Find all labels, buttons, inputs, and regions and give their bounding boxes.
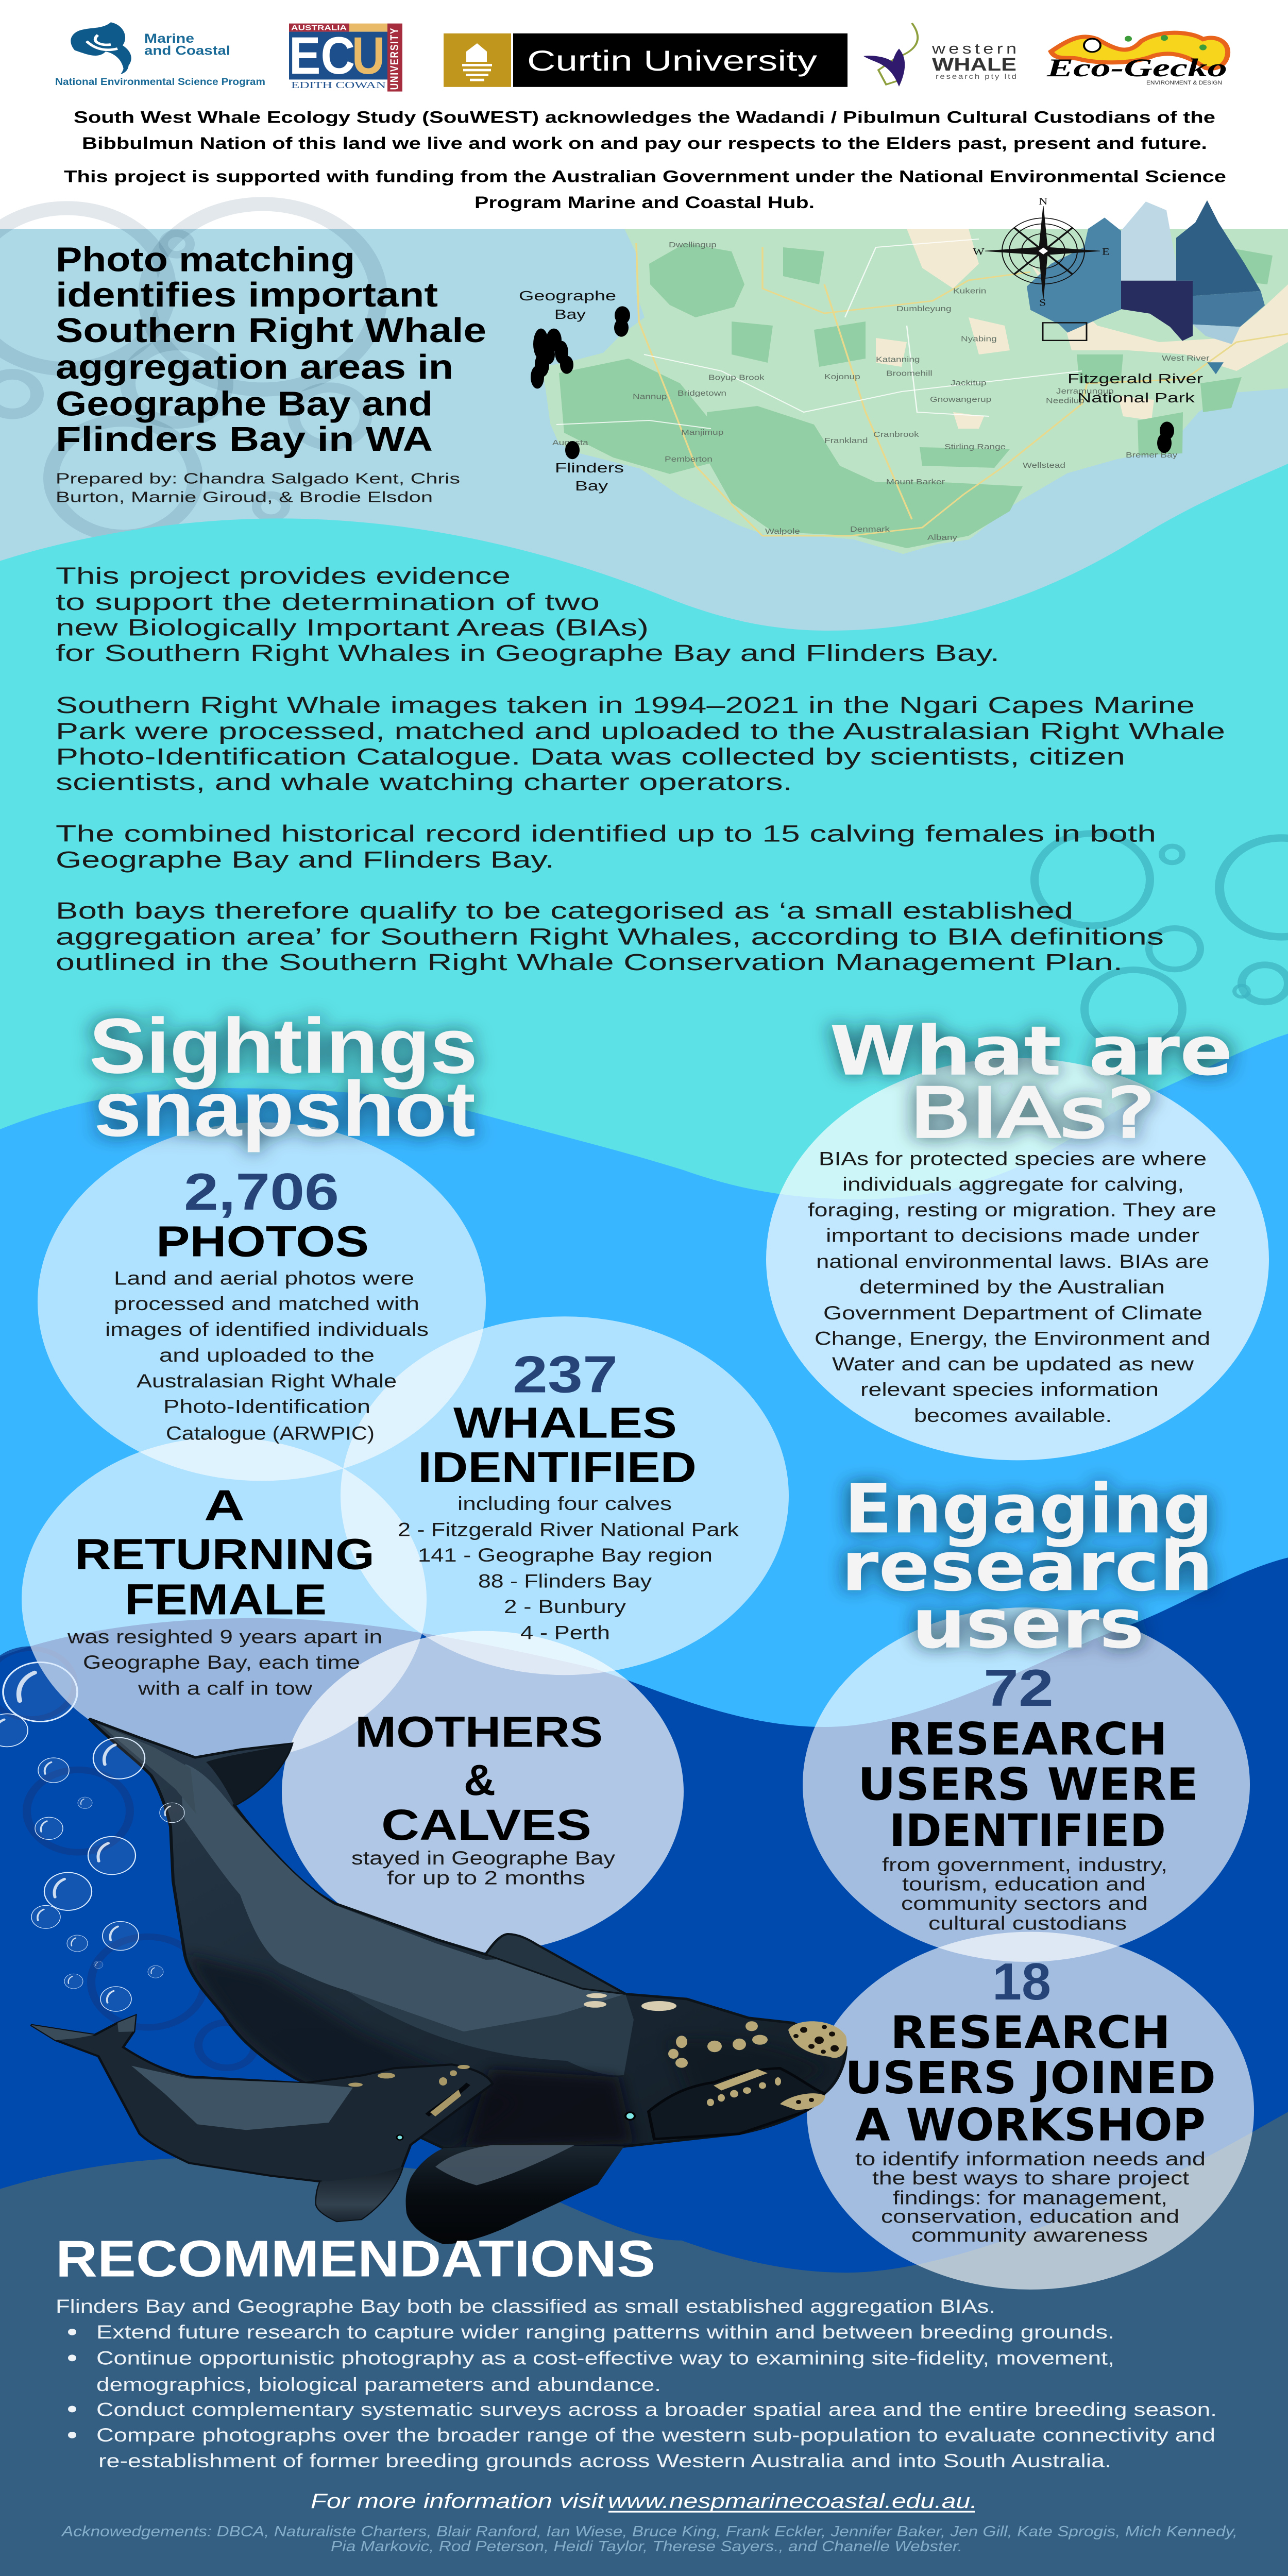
logo: Western Whale Research: WHALE [932,55,1016,75]
whale: callosity texture [793,2025,839,2104]
text: BIAs definition: BIAs for protected species are where [819,1148,1207,1170]
text: whales identified: 141 - Geographe Bay region [418,1545,713,1566]
text: returning female: RETURNING [75,1530,375,1579]
text: returning female: was resighted 9 years apart in [67,1626,382,1648]
map: small place names: Bridgetown [677,388,726,398]
title: Southern Right Whale [56,311,486,350]
text: mothers and calves: CALVES [381,1801,591,1850]
text: 72 research users identified: tourism, education and [902,1873,1146,1895]
title: identifies important [56,276,438,314]
map: small place names: Gnowangerup [930,395,991,404]
body text [56,562,1225,975]
title: Geographe Bay and [56,384,433,423]
map inset: Australia [1027,200,1265,374]
logo: Curtin University [444,33,848,87]
body text: for Southern Right Whales in Geographe Bay and Flinders Bay. [56,640,999,666]
map: forest and reserve patches [559,243,1273,548]
text: photos: images of identified individuals [105,1318,429,1340]
text: whales identified: 88 - Flinders Bay [478,1570,652,1592]
map: small place names [552,240,1210,542]
acknowledgement of country text [64,107,1226,212]
circle: returning female [22,1437,427,1761]
text: mothers and calves: stayed in Geographe Bay [351,1848,615,1869]
map: small place names: Denmark [850,524,890,534]
text: photos: PHOTOS [156,1217,369,1266]
map: small place names: Nannup [633,392,667,401]
wave: slate recommendations [0,2112,1288,2576]
logo: Marine and Coastal Hub: and Coastal [144,43,230,58]
text: BIAs definition: important to decisions made under [826,1225,1199,1246]
map: small place names: Jackitup [951,378,987,387]
map: sighting points [531,306,1174,459]
map: small place names: Mount Barker [886,477,945,486]
icon: compass rose: S [1039,297,1046,308]
text: 18 research users joined: to identify information needs and [855,2148,1206,2170]
map: dry farmland [876,229,1288,429]
text: 18 research users joined: findings: for management, [893,2187,1167,2208]
text: recommendations list: Extend future research to capture wider ranging patterns within and between breeding grounds. [96,2321,1114,2343]
map: small place names: Dwellingup [669,240,717,249]
text: returning female [67,1481,382,1699]
calf: fluke highlight [31,2015,135,2040]
circle: photos [38,1122,486,1481]
map: small place names: Augusta [552,438,588,447]
text: mothers and calves: for up to 2 months [387,1867,585,1889]
whale: fluke dark shade [206,1744,292,1805]
map: small place names: Wellstead [1023,461,1065,470]
whale: eye [625,2112,635,2120]
circle: what are BIAs [766,1058,1269,1460]
text: photos: Catalogue (ARWPIC) [166,1422,375,1444]
icon: compass rose: N [1039,196,1048,207]
heading: What are BIAs: BIAs? [909,1074,1155,1153]
text: mothers and calves [351,1707,615,1889]
text: 18 research users joined: RESEARCH [890,2007,1171,2059]
heading: recommendations: RECOMMENDATIONS [56,2230,655,2287]
icon: compass rose [973,196,1110,308]
text: more information link [311,2489,977,2513]
calf: flipper [316,2167,402,2221]
text: returning female: Geographe Bay, each time [83,1652,360,1673]
acknowledgement of country text: This project is supported with funding from the Australian Government under the National Environmental Science [64,167,1226,186]
text: BIAs definition: Water and can be updated as new [832,1353,1194,1375]
text: whales identified: WHALES [453,1398,677,1447]
map: small place names: Walpole [765,527,800,536]
text: photos: 2,706 [184,1163,339,1221]
heading: Sightings snapshot [89,1002,478,1153]
text: recommendations list [56,2295,1217,2471]
text: photos: and uploaded to the [159,1345,375,1366]
text: whales identified: 237 [513,1345,618,1403]
body text: Geographe Bay and Flinders Bay. [56,846,554,873]
text: recommendations list: re-establishment of former breeding grounds across Western Australia and into South Australia. [98,2450,1111,2471]
text: BIAs definition: determined by the Australian [859,1276,1165,1297]
text: whales identified: 2 - Bunbury [504,1596,626,1617]
logos row [55,22,1228,92]
map inset: study area box [1043,323,1087,341]
text: recommendations list: Conduct complementary systematic surveys across a broader spatial area and the entire breeding season. [96,2399,1217,2420]
wave: bright blue [0,1033,1288,2576]
logo: Edith Cowan University: EC [289,26,355,85]
text: BIAs definition: Change, Energy, the Environment and [815,1328,1210,1349]
map: small place names: West River [1162,353,1210,363]
text: 72 research users identified: RESEARCH [888,1714,1167,1766]
circle: 18 research users [807,1932,1254,2290]
text: 72 research users identified: IDENTIFIED [889,1805,1166,1857]
body text: outlined in the Southern Right Whale Conservation Management Plan. [56,949,1123,975]
whale: callosities [668,2021,847,2110]
text: photos: Photo-Identification [163,1396,370,1417]
text: 72 research users identified [858,1659,1198,1934]
title: aggregation areas in [56,348,453,386]
whale: white marks [584,1993,676,2011]
map: small place names: Boyup Brook [708,372,765,382]
text: 72 research users identified: cultural custodians [928,1912,1127,1934]
body text: aggregation area’ for Southern Right Whales, according to BIA definitions [56,923,1164,950]
map: small place names: Katanning [876,354,920,364]
text: BIAs definition [808,1148,1216,1426]
text: whales identified: 2 - Fitzgerald River National Park [398,1519,739,1540]
logo: Western Whale Research: research pty ltd [936,73,1016,80]
map labels: Flinders [555,461,624,476]
decorative rings on turquoise [1035,834,1288,1048]
logo: Western Whale Research [863,23,1016,87]
title [56,240,486,459]
heading: What are BIAs [829,1012,1233,1153]
body text: Both bays therefore qualify to be categorised as ‘a small established [56,897,1073,924]
decorative rings behind title [0,204,379,536]
map: small place names: Albany [927,533,957,542]
icon: compass rose: W [973,246,985,257]
decorative rings on dark blue [0,1649,255,2068]
logo: Eco-Gecko: Eco-Gecko [1046,54,1227,82]
map: small place names: Needilup [1046,396,1084,405]
logo: Edith Cowan University: EDITH COWAN [291,80,386,91]
text: acknowledgements: Pia Markovic, Rod Peterson, Heidi Taylor, Therese Sayers., and Chanelle Webster. [331,2537,962,2554]
map: small place names: Stirling Range [944,442,1006,451]
text: 18 research users joined: community awareness [911,2225,1148,2246]
logo: Edith Cowan University: U [352,26,385,85]
logo: Edith Cowan University: UNIVERSITY [388,28,401,90]
text: 18 research users joined [845,1953,1216,2246]
text: more information link: For more information visit [311,2489,606,2513]
authors [56,470,460,505]
map: small place names: Pemberton [665,454,713,464]
whale: soft shading [100,1725,824,2156]
map labels: Bay [554,308,586,322]
whale: mouth line [649,2068,824,2139]
acknowledgement of country text: Program Marine and Coastal Hub. [474,193,815,212]
whale: dorsal fin shading [486,1934,625,1994]
text: 18 research users joined: the best ways to share project [872,2167,1189,2189]
whale: flipper [406,2146,624,2244]
text: photos: processed and matched with [114,1293,419,1314]
icon: compass rose: E [1102,246,1110,257]
body text: Photo-Identification Catalogue. Data was collected by scientists, citizen [56,743,1125,770]
calf: eye [397,2135,403,2140]
white header background [0,0,1288,229]
body text: to support the determination of two [56,588,600,615]
map: small place names: Dumbleyung [896,304,952,313]
body text: new Biologically Important Areas (BIAs) [56,614,649,640]
map labels: Geographe [519,289,616,303]
body text: The combined historical record identified up to 15 calving females in both [56,820,1156,846]
map: small place names: Frankland [824,436,868,445]
illustration: mother whale [89,1719,847,2244]
logo: Edith Cowan University: AUSTRALIA [291,24,347,32]
text: returning female: A [204,1481,245,1530]
text: mothers and calves: MOTHERS [355,1707,603,1756]
illustration: calf whale [31,2015,493,2221]
logo: Marine and Coastal Hub: Marine [144,31,194,46]
text: 18 research users joined: 18 [992,1953,1051,2011]
text: recommendations list: demographics, biological parameters and abundance. [96,2374,661,2395]
map labels: Fitzgerald River [1067,372,1203,386]
logo: Curtin University: Curtin University [527,45,817,77]
body text: Southern Right Whale images taken in 1994–2021 in the Ngari Capes Marine [56,691,1195,718]
map labels: Bay [575,479,608,494]
map: small place names: Nyabing [961,334,997,343]
heading: Sightings snapshot: Sightings [89,1002,478,1090]
text: whales identified: including four calves [457,1493,672,1514]
wave: dark blue [0,1557,1288,2576]
heading: What are BIAs: What are [829,1012,1233,1091]
text: more information link: www.nespmarinecoastal.edu.au. [608,2489,977,2513]
text: BIAs definition: Government Department of Climate [823,1302,1202,1324]
text: photos: Land and aerial photos were [114,1267,414,1289]
calf: lighter back band [131,2066,353,2130]
text: recommendations list: Compare photographs over the broader range of the western sub-population to evaluate connectivity and [96,2425,1215,2446]
logo: Western Whale Research: western [931,40,1016,57]
text: returning female: with a calf in tow [138,1677,313,1699]
body text: This project provides evidence [56,562,511,589]
icon: air bubbles [0,1662,184,2011]
logo: Marine and Coastal Hub: National Environmental Science Program [55,76,265,87]
text: recommendations list: Continue opportunistic photography as a cost-effective way to examining site-fidelity, movement, [96,2347,1114,2369]
authors: Prepared by: Chandra Salgado Kent, Chris [56,470,460,487]
map: small place names: Manjimup [681,428,723,437]
text: whales identified: IDENTIFIED [418,1443,697,1492]
acknowledgement of country text: Bibbulmun Nation of this land we live and work on and pay our respects to the Elders past, present and future. [82,133,1207,152]
text: recommendations list: Flinders Bay and Geographe Bay both be classified as small established aggregation BIAs. [56,2295,995,2317]
text: acknowledgements [61,2523,1238,2554]
logo: Eco-Gecko: ENVIRONMENT & DESIGN [1146,79,1222,86]
map labels [519,289,1203,494]
text: photos: Australasian Right Whale [137,1370,397,1392]
text: 72 research users identified: USERS WERE [858,1759,1198,1811]
map: small place names: Broomehill [886,368,933,378]
title: Flinders Bay in WA [56,420,433,459]
whale: flipper highlight [435,2145,575,2185]
text: 72 research users identified: 72 [984,1659,1054,1717]
map: small place names: Cranbrook [873,430,919,439]
body text: scientists, and whale watching charter operators. [56,769,792,795]
title: Photo matching [56,240,355,279]
map labels: National Park [1077,391,1195,405]
text: whales identified: 4 - Perth [520,1622,610,1643]
circle: whales identified [341,1316,789,1675]
heading: Sightings snapshot: snapshot [94,1065,476,1153]
text: 18 research users joined: USERS JOINED [845,2053,1216,2104]
heading: Engaging research users: users [912,1585,1144,1664]
text: 18 research users joined: A WORKSHOP [855,2099,1206,2151]
text: 72 research users identified: from government, industry, [882,1854,1167,1875]
text: BIAs definition: individuals aggregate for calving, [842,1174,1184,1195]
text: BIAs definition: foraging, resting or migration. They are [808,1199,1216,1221]
heading: Engaging research users: Engaging [844,1469,1213,1549]
logo: Marine and Coastal Hub [55,22,265,87]
circle: 72 research users [803,1607,1250,1962]
calf: callosities and mouth [427,2084,468,2115]
text: 72 research users identified: community sectors and [901,1893,1148,1914]
text: BIAs definition: national environmental laws. BIAs are [816,1250,1209,1272]
map: small place names: Bremer Bay [1126,450,1178,460]
authors: Burton, Marnie Giroud, & Brodie Elsdon [56,488,433,505]
text: mothers and calves: & [464,1756,496,1805]
text: BIAs definition: relevant species information [860,1379,1159,1400]
text: whales identified [398,1345,739,1643]
map: small place names: Jerramungup [1056,386,1114,396]
body text: Park were processed, matched and uploaded to the Australasian Right Whale [56,718,1225,744]
map: roads [636,243,1288,536]
text: BIAs definition: becomes available. [914,1404,1112,1426]
text: returning female: FEMALE [125,1575,327,1624]
map: small place names: Kojonup [824,372,860,381]
text: 18 research users joined: conservation, education and [881,2206,1179,2227]
map: south west Western Australia [542,229,1288,554]
text: photos [105,1163,429,1444]
logo: Eco-Gecko [1046,33,1228,86]
heading: Engaging research users [841,1469,1213,1664]
map: small place names: Kukerin [953,286,986,295]
acknowledgement of country text: South West Whale Ecology Study (SouWEST) acknowledges the Wadandi / Pibulmun Cultural Custodians of the [74,107,1215,126]
circle: mothers and calves [282,1631,684,1953]
heading: Engaging research users: research [841,1527,1213,1606]
